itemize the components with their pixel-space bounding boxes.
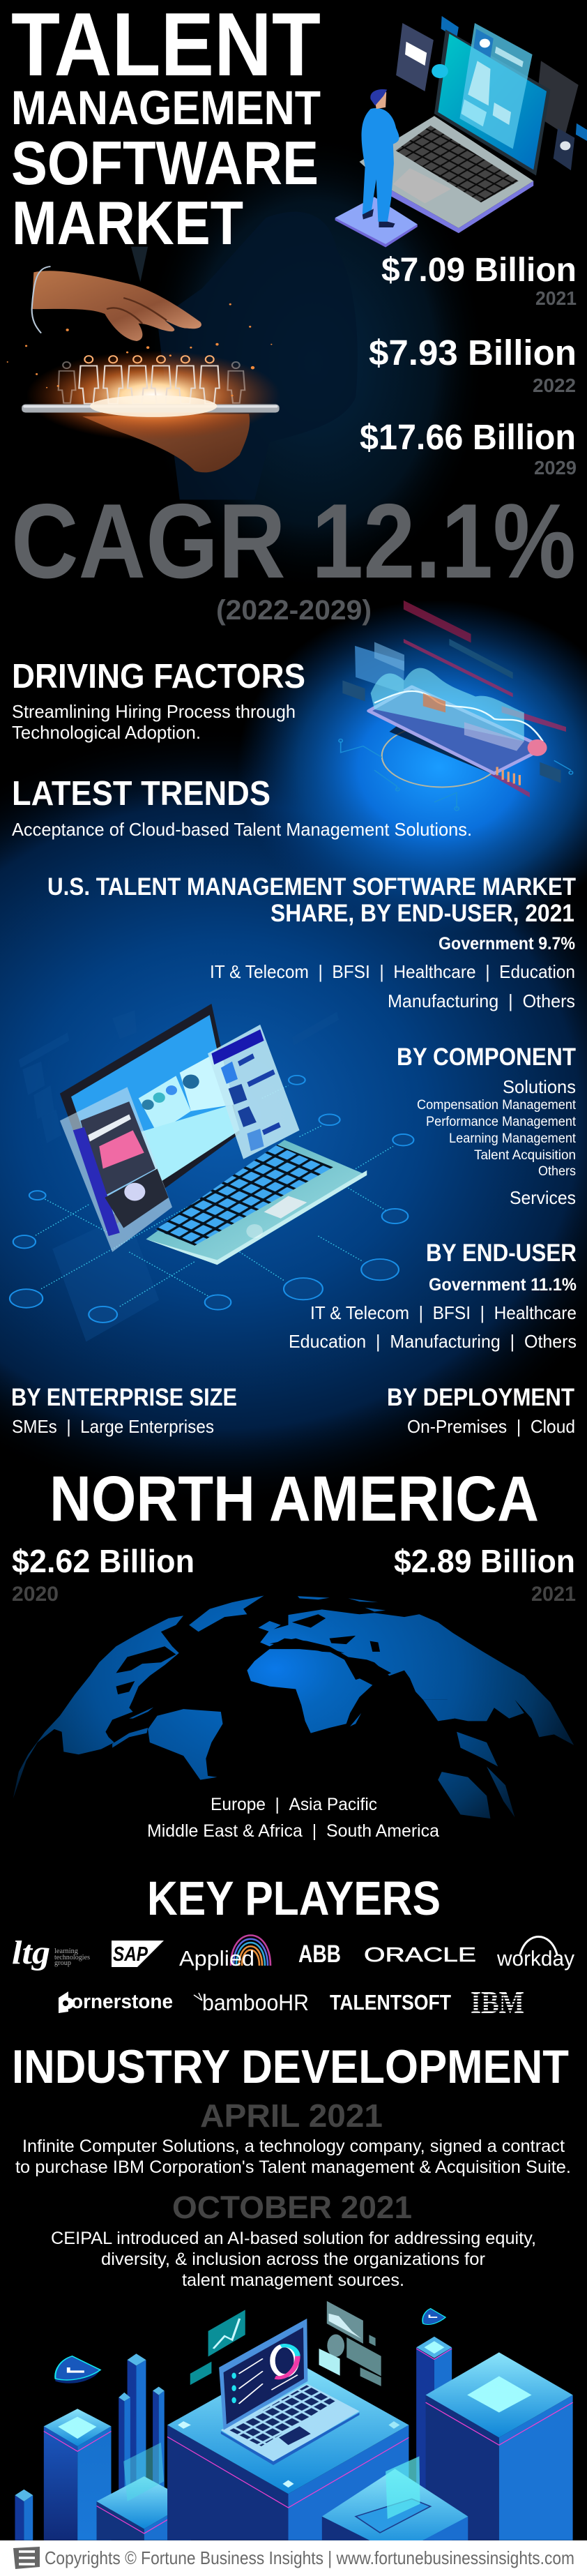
by component: Performance Management [426, 1115, 577, 1129]
latest trends: Acceptance of Cloud-based Talent Management Solutions. [12, 819, 472, 840]
low left block [97, 2443, 191, 2540]
stat: 2029 market size [360, 417, 577, 479]
by component: Solutions [503, 1076, 576, 1097]
north america heading: NORTH AMERICA [49, 1463, 539, 1535]
development: October 2021 [51, 2190, 536, 2290]
latest trends: LATEST TRENDS [12, 775, 270, 813]
development: October 2021: talent management sources. [182, 2270, 404, 2290]
logo: SAP [112, 1941, 164, 1967]
logo: ABB: ABB [298, 1941, 341, 1968]
north america 2020 value: 2020 [12, 1583, 59, 1606]
other regions: Europe | Asia Pacific [211, 1795, 377, 1814]
stat: 2029 market size: $17.66 Billion [360, 417, 576, 457]
thin background towers [119, 2353, 165, 2509]
north america 2021 value: 2021 [531, 1583, 576, 1606]
logo: Applied: Applied [179, 1946, 254, 1971]
logo: BambooHR: bambooHR [202, 1990, 309, 2015]
by component [397, 1044, 577, 1208]
development: October 2021: diversity, & inclusion across the organizations for [101, 2250, 485, 2269]
by enterprise size: BY ENTERPRISE SIZE [11, 1384, 237, 1411]
stat: 2022 market size: $7.93 Billion [369, 333, 577, 372]
left tall block [44, 2409, 111, 2540]
by end-user [289, 1240, 577, 1352]
by component: Talent Acquisition [474, 1148, 576, 1163]
key players heading: KEY PLAYERS [147, 1871, 441, 1925]
logo: Workday: workday [496, 1946, 574, 1971]
by component: Services [510, 1187, 576, 1208]
by component: Others [538, 1164, 576, 1179]
by enterprise size: SMEs | Large Enterprises [12, 1416, 214, 1437]
U.S. share by end-user: Government 9.7% [439, 934, 575, 954]
stat: 2022 market size [369, 333, 577, 396]
north america 2020 value [12, 1543, 195, 1606]
development: April 2021: Infinite Computer Solutions, a technology company, signed a contract [22, 2137, 565, 2156]
other regions [147, 1795, 439, 1841]
development: April 2021: to purchase IBM Corporation's Talent management & Acquisition Suite. [15, 2157, 571, 2177]
illustration: data tablet [339, 601, 573, 811]
far left small tower [15, 2490, 33, 2540]
U.S. share by end-user [47, 873, 576, 1011]
development: April 2021 [15, 2097, 571, 2177]
stat: 2029 market size: 2029 [534, 457, 577, 479]
by end-user: Education | Manufacturing | Others [289, 1331, 577, 1352]
logo: ltg: ltg [12, 1934, 50, 1971]
logo: ltg: group [54, 1959, 71, 1967]
development: October 2021: OCTOBER 2021 [172, 2190, 412, 2225]
stat: 2021 market size: 2021 [535, 287, 577, 309]
shield badge left [55, 2356, 100, 2383]
title [11, 0, 321, 257]
driving factors: Technological Adoption. [12, 722, 201, 743]
illustration: hand over tablet with people icons [7, 212, 358, 499]
driving factors: Streamlining Hiring Process through [12, 701, 296, 722]
title: SOFTWARE [11, 128, 319, 197]
shield badge right [422, 2309, 445, 2324]
other regions: Middle East & Africa | South America [147, 1821, 439, 1841]
logo: Oracle: ORACLE [364, 1944, 476, 1966]
logo: ltg: technologies [54, 1954, 90, 1961]
large right block [426, 2352, 573, 2540]
by enterprise size [11, 1384, 237, 1437]
world globe map [13, 1596, 574, 1818]
logo: Applied [179, 1935, 270, 1971]
low right block [322, 2456, 468, 2554]
logo: ltg: learning [54, 1948, 78, 1955]
footer logo [13, 2547, 40, 2569]
U.S. share by end-user: IT & Telecom | BFSI | Healthcare | Education [210, 961, 575, 982]
north america 2021 value [394, 1543, 576, 1606]
illustration: person with laptop [335, 16, 587, 248]
U.S. share by end-user: Manufacturing | Others [388, 991, 575, 1011]
title: MARKET [12, 188, 243, 257]
illustration: laptop with floating panels [10, 1004, 413, 1341]
logo: Talentsoft: TALENTSOFT [330, 1990, 451, 2014]
logo: IBM: IBM [471, 1985, 524, 2020]
by component: Learning Management [449, 1131, 577, 1146]
stat: 2021 market size [381, 252, 577, 309]
title: MANAGEMENT [11, 81, 321, 135]
driving factors [12, 658, 305, 743]
by end-user: IT & Telecom | BFSI | Healthcare [310, 1302, 577, 1323]
central block [167, 2358, 409, 2540]
logo: SAP: SAP [113, 1943, 148, 1966]
stat: 2022 market size: 2022 [533, 375, 576, 396]
north america 2020 value: $2.62 Billion [12, 1543, 195, 1579]
latest trends [12, 775, 472, 840]
development: October 2021: CEIPAL introduced an AI-based solution for addressing equity, [51, 2229, 536, 2248]
laptop [219, 2319, 360, 2465]
logo: Workday [496, 1936, 574, 1971]
north america 2021 value: $2.89 Billion [394, 1543, 575, 1579]
driving factors: DRIVING FACTORS [12, 658, 305, 695]
logo: Cornerstone: ornerstone [71, 1991, 173, 2013]
by end-user: Government 11.1% [429, 1275, 577, 1295]
by deployment [387, 1384, 575, 1437]
by component: Compensation Management [417, 1098, 577, 1113]
tall right block [416, 2337, 452, 2540]
logo: ltg [12, 1934, 90, 1971]
floating chart panels [190, 2301, 381, 2386]
illustration: isometric city with laptop [15, 2301, 573, 2554]
CAGR figure: (2022-2029) [216, 595, 372, 626]
footer bar [0, 2540, 587, 2576]
stat: 2021 market size: $7.09 Billion [381, 252, 577, 289]
development: April 2021: APRIL 2021 [200, 2097, 383, 2134]
by deployment: On-Premises | Cloud [407, 1416, 575, 1437]
